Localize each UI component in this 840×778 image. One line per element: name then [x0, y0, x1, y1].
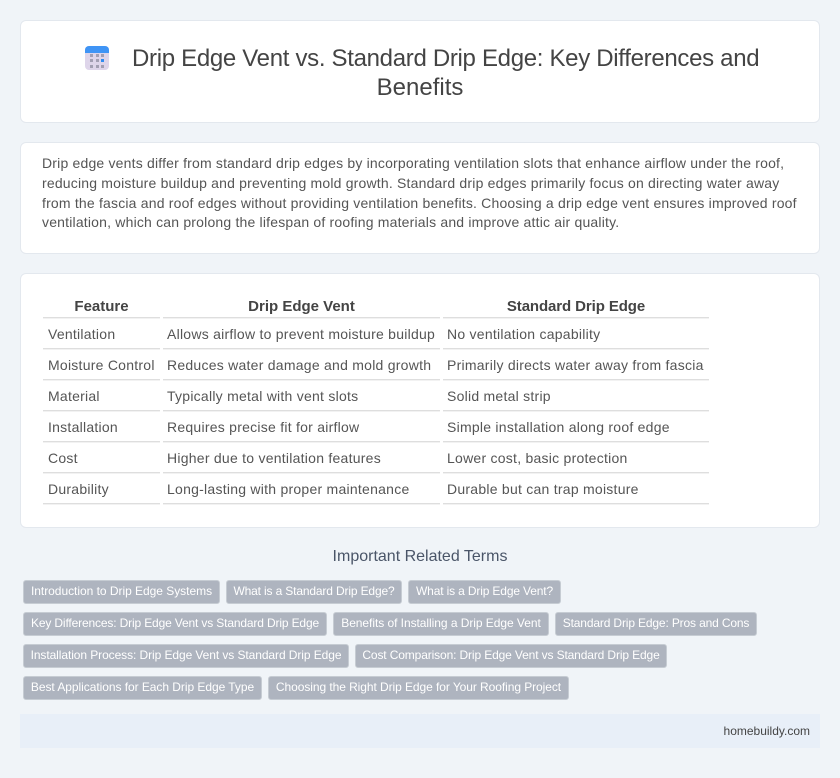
tag [555, 612, 757, 636]
row: installation [48, 419, 670, 435]
intro paragraph [42, 155, 797, 230]
row: moisture control: Primarily directs water away from fascia [447, 357, 704, 373]
row: durability: Durable but can trap moisture [447, 481, 639, 497]
row: durability: Long-lasting with proper maintenance [167, 481, 409, 497]
row: cost [48, 450, 628, 466]
tag: Benefits of Installing a Drip Edge Vent [341, 616, 541, 630]
table header: Drip Edge Vent [248, 298, 355, 315]
title: Benefits [377, 74, 463, 101]
title [132, 45, 759, 101]
row: installation: Requires precise fit for airflow [167, 419, 359, 435]
row: durability: Durability [48, 481, 109, 497]
row: material: Material [48, 388, 100, 404]
table header [74, 298, 645, 315]
row: cost: Lower cost, basic protection [447, 450, 628, 466]
tag: Key Differences: Drip Edge Vent vs Standard Drip Edge [31, 616, 319, 630]
tag: What is a Standard Drip Edge? [233, 584, 395, 598]
tag [408, 580, 561, 604]
row: cost: Higher due to ventilation features [167, 450, 381, 466]
row: material [48, 388, 551, 404]
comparison table [43, 298, 709, 505]
row: installation: Installation [48, 419, 118, 435]
intro text panel [20, 142, 820, 254]
row: moisture control: Moisture Control [48, 357, 155, 373]
intro paragraph: reducing moisture buildup and preventing mold growth. Standard drip edges primarily focus on directing water away [42, 175, 779, 191]
row: material: Typically metal with vent slots [167, 388, 358, 404]
tag [355, 644, 667, 668]
header card [20, 20, 820, 123]
row: durability [48, 481, 639, 497]
tag: Standard Drip Edge: Pros and Cons [563, 616, 749, 630]
footer bar [20, 714, 820, 748]
title: Drip Edge Vent vs. Standard Drip Edge: Key Differences and [132, 45, 759, 72]
comparison table panel [20, 273, 820, 528]
tag [23, 580, 220, 604]
tag: Installation Process: Drip Edge Vent vs Standard Drip Edge [31, 648, 341, 662]
icon: calendar [85, 46, 109, 70]
tag: Introduction to Drip Edge Systems [31, 584, 212, 598]
tag: Best Applications for Each Drip Edge Type [31, 680, 254, 694]
tag: Choosing the Right Drip Edge for Your Roofing Project [276, 680, 561, 694]
tag [268, 676, 569, 700]
table header: Feature [74, 298, 129, 315]
row: cost: Cost [48, 450, 78, 466]
row: moisture control [48, 357, 704, 373]
table header: Standard Drip Edge [507, 298, 645, 315]
tag [23, 612, 327, 636]
row: ventilation [48, 326, 600, 342]
footer source: homebuildy.com [724, 724, 810, 738]
intro paragraph: from the fascia and roof edges without providing ventilation benefits. Choosing a drip edge vent ensures improved roof [42, 195, 797, 211]
tag: Cost Comparison: Drip Edge Vent vs Standard Drip Edge [362, 648, 660, 662]
tag [333, 612, 549, 636]
tag [23, 676, 262, 700]
intro paragraph: Drip edge vents differ from standard drip edges by incorporating ventilation slots that enhance airflow under the roof, [42, 155, 784, 171]
row: ventilation: No ventilation capability [447, 326, 600, 342]
related terms tags [23, 580, 757, 700]
row: ventilation: Allows airflow to prevent moisture buildup [167, 326, 435, 342]
tag [23, 644, 349, 668]
row: installation: Simple installation along roof edge [447, 419, 670, 435]
related terms heading: Important Related Terms [333, 548, 507, 565]
intro paragraph: ventilation, which can prolong the lifespan of roofing materials and improve attic air quality. [42, 214, 619, 230]
row: material: Solid metal strip [447, 388, 551, 404]
row: moisture control: Reduces water damage and mold growth [167, 357, 431, 373]
row: ventilation: Ventilation [48, 326, 115, 342]
tag [226, 580, 402, 604]
tag: What is a Drip Edge Vent? [416, 584, 553, 598]
